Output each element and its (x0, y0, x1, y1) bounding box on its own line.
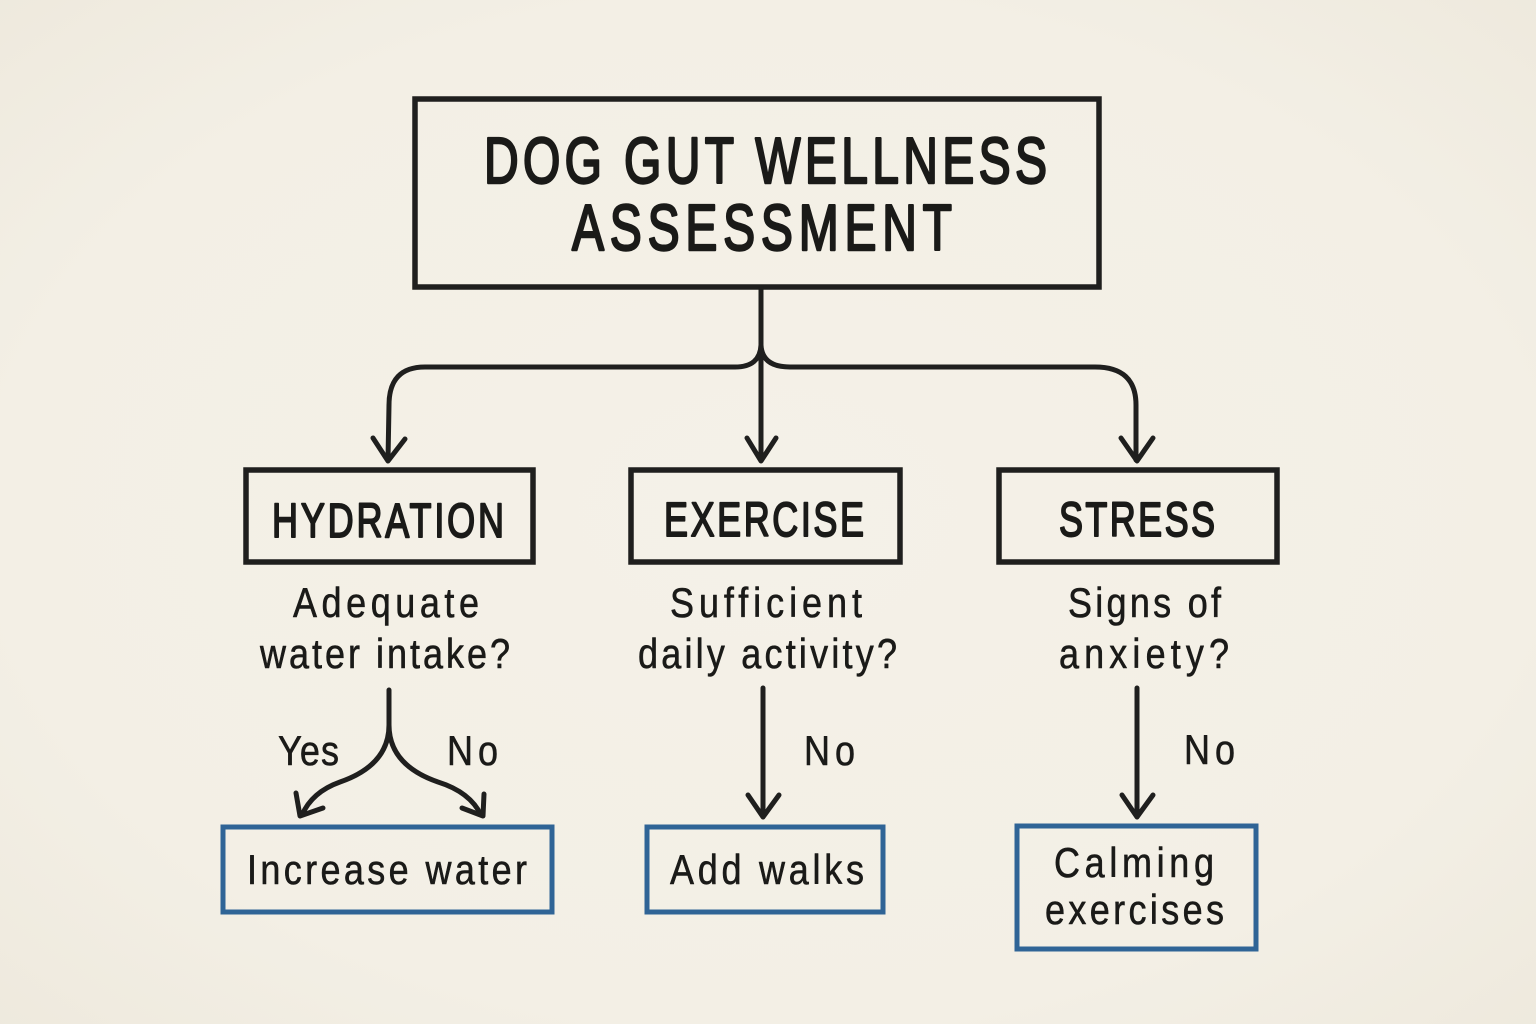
stress arrow (1122, 688, 1153, 817)
hydration heading (246, 470, 533, 562)
hydration question: water intake? (259, 632, 510, 678)
action: add walks (647, 827, 883, 912)
action: calming exercises: Calming (1054, 841, 1214, 887)
title text: ASSESSMENT (572, 192, 952, 265)
hydration question: Adequate (293, 581, 479, 627)
panel: hydration (223, 470, 552, 912)
label: no: No (447, 729, 498, 775)
exercise question (638, 581, 897, 678)
hydration yes/no branching arrows (296, 690, 484, 816)
panel: stress (999, 470, 1277, 949)
stress question: anxiety? (1059, 632, 1229, 678)
panel: exercise (631, 470, 900, 912)
title box (415, 99, 1099, 287)
label: no: No (804, 729, 855, 775)
label: no: No (1184, 728, 1235, 774)
exercise question: daily activity? (638, 632, 897, 678)
exercise question: Sufficient (670, 581, 862, 627)
stress heading (999, 470, 1277, 562)
action: increase water: Increase water (247, 848, 527, 894)
title text (484, 125, 1047, 265)
stress heading: STRESS (1059, 493, 1215, 547)
connector arrows from title to categories (373, 288, 1153, 461)
exercise arrow (748, 688, 779, 817)
stress question (1059, 581, 1229, 678)
hydration question (259, 581, 510, 678)
action: calming exercises (1017, 826, 1256, 949)
exercise heading (631, 470, 900, 562)
hydration heading: HYDRATION (272, 494, 504, 548)
title text: DOG GUT WELLNESS (484, 125, 1047, 198)
action: increase water (223, 827, 552, 912)
exercise heading: EXERCISE (664, 493, 864, 547)
label: yes: Yes (278, 729, 339, 775)
action: calming exercises: exercises (1045, 888, 1224, 934)
stress question: Signs of (1068, 581, 1221, 627)
action: add walks: Add walks (670, 848, 864, 894)
